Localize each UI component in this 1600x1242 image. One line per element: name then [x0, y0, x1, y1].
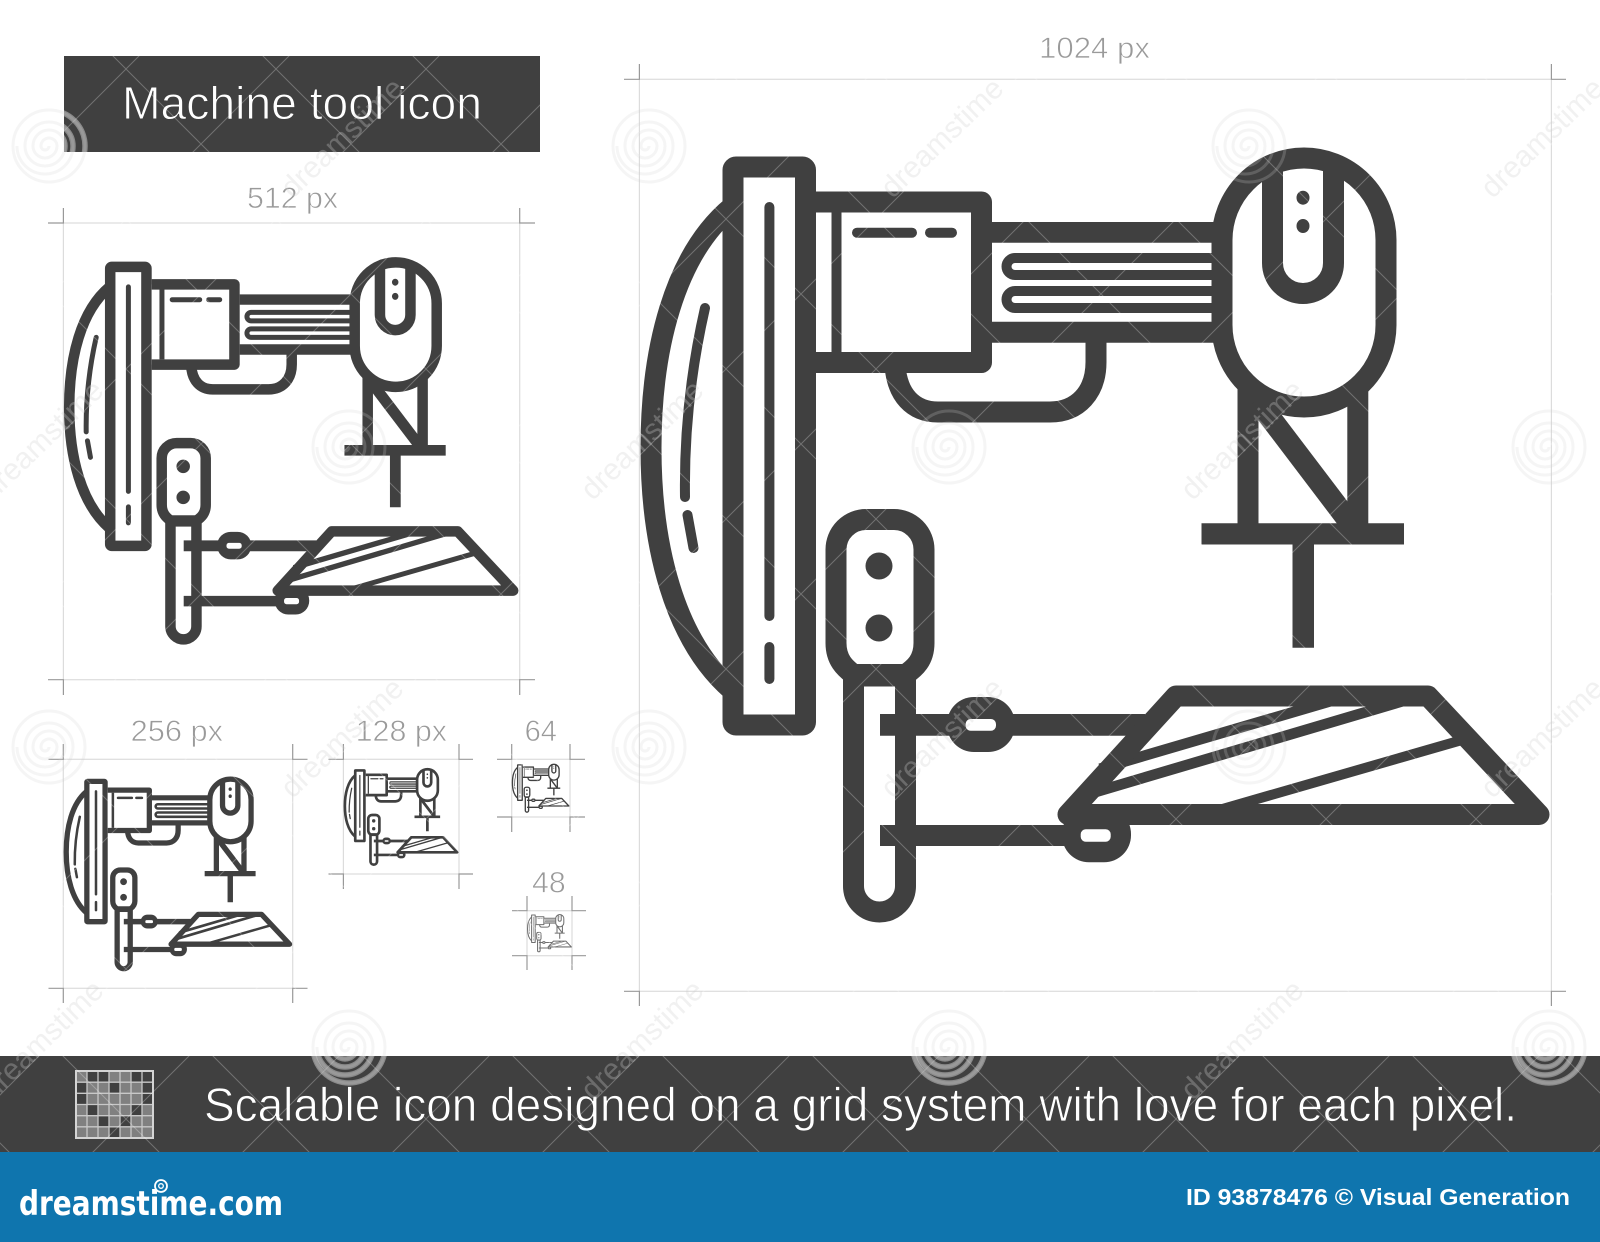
watermark overlay: dreamstime [275, 72, 410, 204]
lever tube [854, 672, 906, 912]
slot dots [1296, 191, 1310, 233]
size frame: 48 px [512, 896, 586, 970]
column inner lines [764, 207, 774, 679]
legs and diagonal brace [1248, 385, 1358, 530]
dome housing [651, 207, 732, 690]
head divider [832, 212, 842, 352]
knot 2 [1062, 807, 1131, 862]
panel: 64 px icon preview [497, 715, 585, 832]
lever neck [853, 664, 905, 686]
connector bars [880, 714, 1145, 846]
watermark overlay: dreamstime [875, 672, 1010, 804]
watermark overlay: dreamstime [1175, 374, 1310, 506]
head dashes [857, 228, 952, 238]
table stripes [1080, 698, 1410, 797]
panel: 1024 px icon preview [624, 32, 1566, 1006]
icon: machine tool 512 [69, 262, 513, 639]
watermark overlay: dreamstime [575, 974, 710, 1106]
watermark overlay: dreamstime [1175, 974, 1310, 1106]
logo: dreamstime.com: dreamstime.com [19, 1184, 283, 1224]
label: 256 px: 256 px [131, 715, 223, 748]
icon: machine tool 256 [66, 779, 290, 969]
label: 64: 64 [525, 715, 557, 748]
column [733, 167, 806, 725]
size frame: 512 px [48, 208, 535, 695]
lever dots [866, 552, 892, 642]
panel: 128 px icon preview [328, 715, 473, 889]
watermark overlay: dreamstime [575, 374, 710, 506]
footer band: stock credit [0, 1152, 1600, 1242]
arm bands [992, 222, 1225, 343]
table outline [1068, 696, 1539, 814]
size frame: 1024 px [624, 64, 1566, 1006]
icon: machine tool 48 [528, 915, 571, 952]
title banner [64, 56, 540, 152]
watermark overlay: dreamstime [275, 672, 410, 804]
panel: 256 px icon preview [48, 715, 308, 1003]
panel: 512 px icon preview [48, 182, 535, 695]
icon: pixel grid [76, 1071, 153, 1138]
label: 128 px: 128 px [356, 715, 447, 748]
title banner: Machine tool icon [122, 77, 482, 129]
label: 1024 px: 1024 px [1039, 32, 1150, 65]
label: 48: 48 [532, 867, 566, 900]
table stripe lower [1205, 738, 1470, 814]
dome highlight [685, 308, 705, 548]
icon: machine tool large [651, 158, 1539, 912]
size frame: 128 px [328, 744, 473, 889]
lever head [836, 520, 924, 674]
watermark overlay: dreamstime [875, 72, 1010, 204]
arm rods [1006, 258, 1215, 308]
image id and credit: ID 93878476 © Visual Generation [1186, 1184, 1570, 1210]
label: 512 px: 512 px [247, 182, 338, 215]
head block [816, 202, 982, 362]
tagline: Scalable icon designed on a grid system with love for each pixel. [204, 1078, 1517, 1131]
icon: machine tool 64 [512, 764, 569, 812]
base bar and stem [1202, 523, 1404, 648]
knot 1 [947, 697, 1015, 752]
size frame: 64 px [497, 744, 585, 832]
footer strip: grid system message [0, 1056, 1600, 1152]
inner U slot [1272, 165, 1334, 294]
oval head [1222, 158, 1386, 407]
panel: 48 px icon preview [512, 867, 586, 970]
icon: machine tool 128 [345, 769, 457, 865]
size frame: 256 px [48, 744, 308, 1003]
hose under arm [895, 342, 1096, 412]
